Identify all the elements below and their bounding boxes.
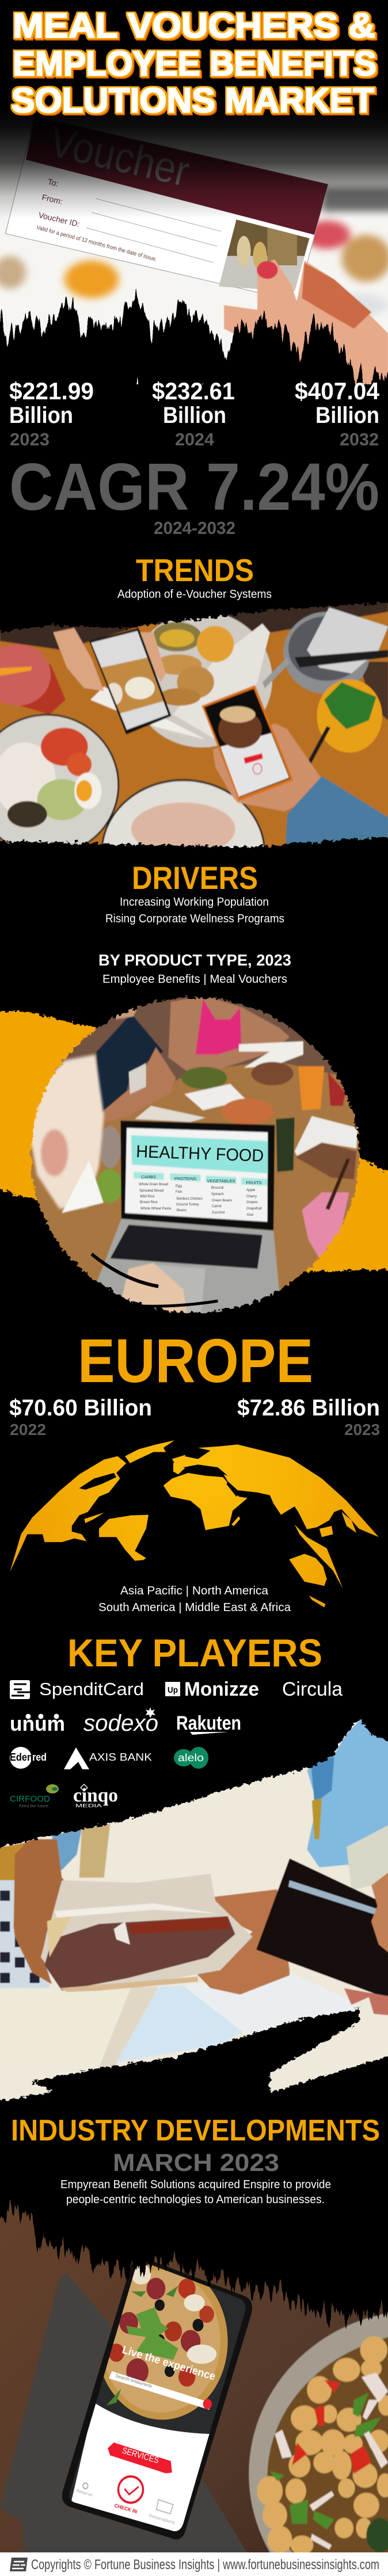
pink drink (0, 644, 66, 715)
phone screen text: Reserve (75, 2488, 93, 2498)
logo: Monizze: Monizze (184, 1678, 259, 1700)
market value 2023: 2023 (10, 429, 50, 449)
product types: Employee Benefits | Meal Vouchers (102, 973, 287, 986)
voucher text: To: (47, 177, 59, 188)
drivers heading: DRIVERS (132, 860, 258, 896)
counter and machine (98, 1973, 358, 2069)
top fade to black (0, 106, 388, 219)
development text: people-centric technologies to American businesses. (66, 2193, 325, 2206)
europe and asia (173, 1444, 379, 1537)
left salad plate (0, 714, 119, 856)
yellow drink with mint (307, 680, 382, 764)
key players heading: KEY PLAYERS (67, 1631, 322, 1675)
logo: Alelo (174, 1747, 208, 1769)
product type heading: BY PRODUCT TYPE, 2023 (98, 951, 291, 969)
orange brush strokes (0, 1011, 388, 1272)
other regions (98, 1585, 291, 1614)
logo: Cirfood: CIRFOOD (10, 1794, 50, 1804)
CAGR: 2024-2032 (154, 518, 235, 538)
reservations icon (157, 2499, 173, 2514)
laptop screen text: Brown Rice (140, 1201, 158, 1204)
market value 2032: $407.04 (295, 377, 380, 404)
laptop screen text: Grapes (246, 1201, 258, 1204)
footer logo (10, 2558, 28, 2571)
right hand (193, 1889, 290, 1994)
napkin (0, 2273, 248, 2554)
laptop screen text: Beans (177, 1209, 187, 1212)
voucher text: From: (41, 192, 64, 206)
market value 2023: Billion (9, 403, 73, 428)
photo: wallet payment at counter (0, 1711, 388, 2121)
Europe 2022 value: 2022 (10, 1421, 46, 1438)
logo: Cinqo Media: cinqo (73, 1785, 118, 1806)
laptop screen text: Sprouted Bread (139, 1189, 163, 1193)
drivers list: Rising Corporate Wellness Programs (105, 913, 284, 925)
phone screen text: Live the experience (121, 2344, 217, 2383)
table food items (97, 1062, 357, 1258)
laptop screen text: Zucchini (212, 1211, 225, 1215)
laptop (97, 1120, 280, 1314)
black drip edge under voucher photo (0, 299, 388, 403)
trends text: Adoption of e-Voucher Systems (117, 588, 272, 601)
africa (163, 1473, 248, 1530)
laptop screen text: Fish (176, 1190, 182, 1194)
market value 2032 (295, 377, 380, 449)
date: MARCH 2023 (113, 2149, 279, 2177)
laptop screen text: Whole Grain Bread (139, 1183, 168, 1186)
hand (224, 259, 388, 385)
southeast asia islands (295, 1525, 343, 1589)
services button (108, 2443, 172, 2474)
phone screen text (75, 2344, 217, 2525)
left hand (13, 1839, 64, 1985)
bald head foreground (30, 1055, 104, 1208)
checker cloth (0, 1880, 50, 1988)
laptop screen text: Green Beans (212, 1199, 232, 1203)
south america (99, 1515, 149, 1561)
laptop screen text: Carrot (212, 1205, 222, 1208)
hand and phone one (53, 628, 172, 734)
paying hand (371, 1872, 388, 1963)
laptop screen text: Spinach (211, 1193, 224, 1196)
photo: team with healthy food laptop (25, 987, 371, 1322)
logo: Monizze: Up (168, 1685, 178, 1695)
title: SOLUTIONS MARKET (12, 81, 374, 120)
laptop screen text: Apple (246, 1189, 256, 1192)
trends heading: TRENDS (136, 552, 254, 588)
phone screen text: Search restaurants (115, 2373, 153, 2389)
laptop screen text: HEALTHY FOOD (136, 1142, 264, 1166)
photo: phone on wooden table with salad (0, 2200, 388, 2576)
Europe heading: EUROPE (78, 1326, 313, 1395)
logo: Cirfood (10, 1784, 59, 1808)
australia (289, 1554, 327, 1586)
logo: Cirfood: Feed the future (19, 1804, 48, 1808)
salad bowl (249, 2310, 388, 2576)
photo: hand holding voucher (0, 108, 388, 390)
greenland (125, 1440, 174, 1463)
market value 2024 (152, 377, 235, 449)
title (12, 6, 376, 120)
blue shirt (307, 1719, 388, 1870)
laptop screen text: Cherry (246, 1195, 257, 1199)
laptop screen text: CARBS (141, 1174, 156, 1180)
phone screen text: CHECK IN (113, 2502, 138, 2514)
laptop screen text: Whole Wheat Pasta (140, 1207, 172, 1211)
bottom plate (101, 779, 265, 926)
market value 2032: Billion (315, 403, 379, 428)
photo: phones on restaurant table (0, 601, 388, 849)
laptop screen text: Grapefruit (246, 1207, 262, 1211)
phone screen text: Reservations (148, 2513, 176, 2525)
laptop screen text: Skinless Chicken (176, 1197, 203, 1201)
silver plate with food (90, 611, 272, 747)
laptop screen text: VEGETABLES (207, 1178, 235, 1184)
logo: Sodexo: sodexo (83, 1711, 158, 1736)
Europe 2023 value (237, 1395, 380, 1438)
market value 2032: 2032 (340, 429, 379, 449)
gold background (0, 1842, 30, 1880)
logo: Edenred: red (32, 1751, 47, 1763)
logo: Cinqo Media: MEDIA (75, 1803, 102, 1808)
navy shirt man (97, 999, 176, 1122)
voucher text: Voucher (45, 117, 194, 196)
search bar (109, 2371, 211, 2410)
Europe 2022 value: $70.60 Billion (9, 1395, 152, 1421)
smartphone (62, 2254, 260, 2542)
laptop screen text: Ground Turkey (176, 1203, 199, 1207)
laptop screen text: FRUITS (246, 1180, 262, 1185)
logo: Alelo: alelo (178, 1752, 204, 1764)
packaged meat (41, 1874, 253, 1992)
hand and phone two (201, 685, 388, 867)
white paper (62, 1160, 104, 1213)
laptop screen text (136, 1142, 264, 1217)
Europe 2022 value (9, 1395, 152, 1438)
metal pot (263, 608, 388, 694)
drivers list: Increasing Working Population (120, 896, 269, 909)
world map (10, 1440, 379, 1608)
black drip edge above phone photo (0, 2163, 388, 2315)
logo: Unum: unum (10, 1712, 65, 1735)
other regions: South America | Middle East & Africa (98, 1601, 291, 1614)
market value 2024: 2024 (175, 429, 215, 449)
logo: Edenred (10, 1747, 47, 1769)
Europe 2023 value: $72.86 Billion (237, 1395, 380, 1421)
logo: Edenred: Eden (10, 1751, 33, 1763)
voucher text: Voucher ID: (37, 210, 81, 228)
other regions: Asia Pacific | North America (120, 1585, 269, 1597)
logo: Axis Bank: AXIS BANK (89, 1751, 152, 1763)
market value 2024: Billion (163, 403, 226, 428)
title: EMPLOYEE BENEFITS (13, 44, 376, 83)
title: MEAL VOUCHERS & (13, 6, 375, 45)
voucher card (5, 116, 328, 302)
logo: Circula: Circula (282, 1678, 343, 1700)
black brush streaks (92, 997, 312, 1306)
market value 2023: $221.99 (9, 377, 94, 404)
north america (10, 1456, 126, 1572)
phone screen text: SERVICES (121, 2446, 160, 2466)
black inland seas (183, 1464, 228, 1476)
check in icon (119, 2476, 143, 2503)
voucher text (36, 117, 221, 263)
pizza (97, 2263, 228, 2419)
laptop screen text: Egg (176, 1185, 182, 1188)
wallet (256, 1858, 388, 2003)
laptop screen text: Broccoli (211, 1186, 223, 1190)
voucher text: Valid for a period of 12 months from the date of issue. (36, 224, 158, 263)
pink top woman (168, 996, 303, 1072)
dollar bills (347, 1819, 388, 1891)
laptop screen text: PROTEINS (174, 1176, 196, 1181)
Europe 2023 value: 2023 (344, 1421, 380, 1438)
development text: Empyrean Benefit Solutions acquired Enspire to provide (60, 2178, 331, 2191)
market value 2023 (9, 377, 94, 449)
logo: SpenditCard: SpenditCard (39, 1679, 144, 1699)
logo: Rakuten: Rakuten (176, 1712, 241, 1734)
development text (60, 2178, 331, 2206)
central america and caribbean (84, 1513, 104, 1523)
laptop screen text: Kiwi (247, 1213, 253, 1217)
logo: Axis Bank (64, 1747, 152, 1769)
laptop screen text: Wild Rice (140, 1195, 155, 1199)
market value 2024: $232.61 (152, 377, 235, 404)
drivers list (105, 896, 284, 925)
footer bar (0, 2552, 388, 2576)
white app panel (62, 2403, 213, 2542)
